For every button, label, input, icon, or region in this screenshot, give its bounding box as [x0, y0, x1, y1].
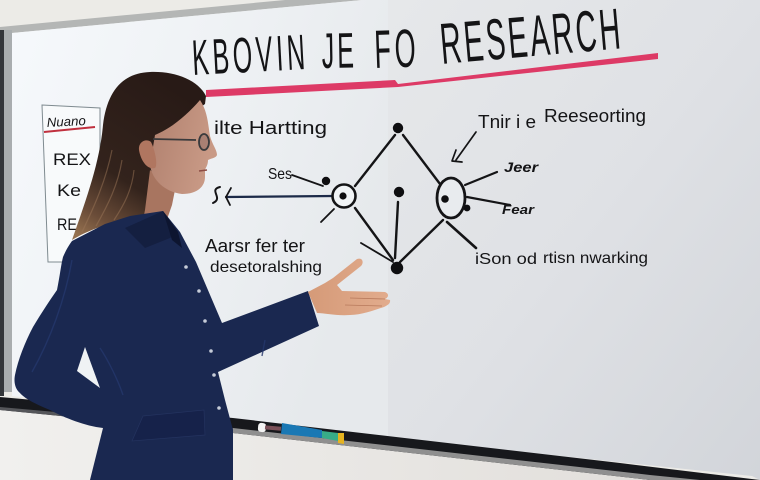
- ear: [139, 140, 156, 168]
- diagram labels: desetoralshing: [210, 259, 322, 276]
- diagram labels: Tnir i e: [478, 112, 536, 132]
- network diagram: [213, 123, 510, 274]
- face: [150, 100, 217, 194]
- buttons: [184, 265, 221, 410]
- glasses: [153, 134, 209, 150]
- board right surface: [388, 0, 760, 480]
- title underline: [206, 53, 658, 97]
- diagram labels: ilte Hartting: [214, 118, 327, 138]
- left spokes: [292, 175, 334, 222]
- marker tray: [0, 397, 760, 480]
- sleeve shading: [32, 260, 265, 395]
- diagram labels: iSon od: [475, 251, 537, 268]
- finger lines: [345, 298, 385, 306]
- diagram labels: Aarsr fer ter: [205, 236, 305, 256]
- hair highlights: [82, 150, 134, 232]
- note card: Ke: [57, 181, 81, 200]
- title: FO: [373, 18, 420, 81]
- diagram labels: Ses: [268, 166, 292, 183]
- markers on tray: [258, 423, 344, 444]
- left node: [332, 184, 356, 208]
- note card: REX: [53, 150, 91, 169]
- presenter: [15, 72, 390, 480]
- right spokes: [447, 172, 510, 248]
- black dots: [322, 123, 470, 274]
- title: KBOVIN: [191, 25, 310, 86]
- note card: RE: [57, 215, 77, 234]
- hand: [308, 259, 390, 315]
- board left surface: [12, 0, 388, 438]
- shirt body and arms: [15, 211, 319, 480]
- callout arrow: [452, 132, 476, 162]
- board top frame: [0, 0, 362, 35]
- hair back: [72, 72, 206, 240]
- diamond lines: [355, 135, 443, 262]
- neck: [140, 170, 175, 235]
- board left frame: [0, 30, 4, 396]
- note card: [42, 105, 100, 262]
- pocket flap: [132, 410, 205, 441]
- right node: [437, 178, 465, 218]
- diagram labels: [205, 106, 648, 276]
- left arrow: [213, 187, 333, 205]
- collar: [125, 211, 178, 248]
- diagram labels: Jeer: [504, 159, 540, 175]
- title: JE: [321, 23, 357, 79]
- diagram labels: Reeseorting: [544, 106, 646, 126]
- diagram labels: Fear: [502, 202, 535, 217]
- diagram labels: rtisn nwarking: [543, 250, 648, 267]
- note card: Nuano: [46, 113, 86, 130]
- gap between arm and torso: [77, 347, 100, 388]
- mouth: [199, 170, 207, 171]
- title: [191, 0, 626, 86]
